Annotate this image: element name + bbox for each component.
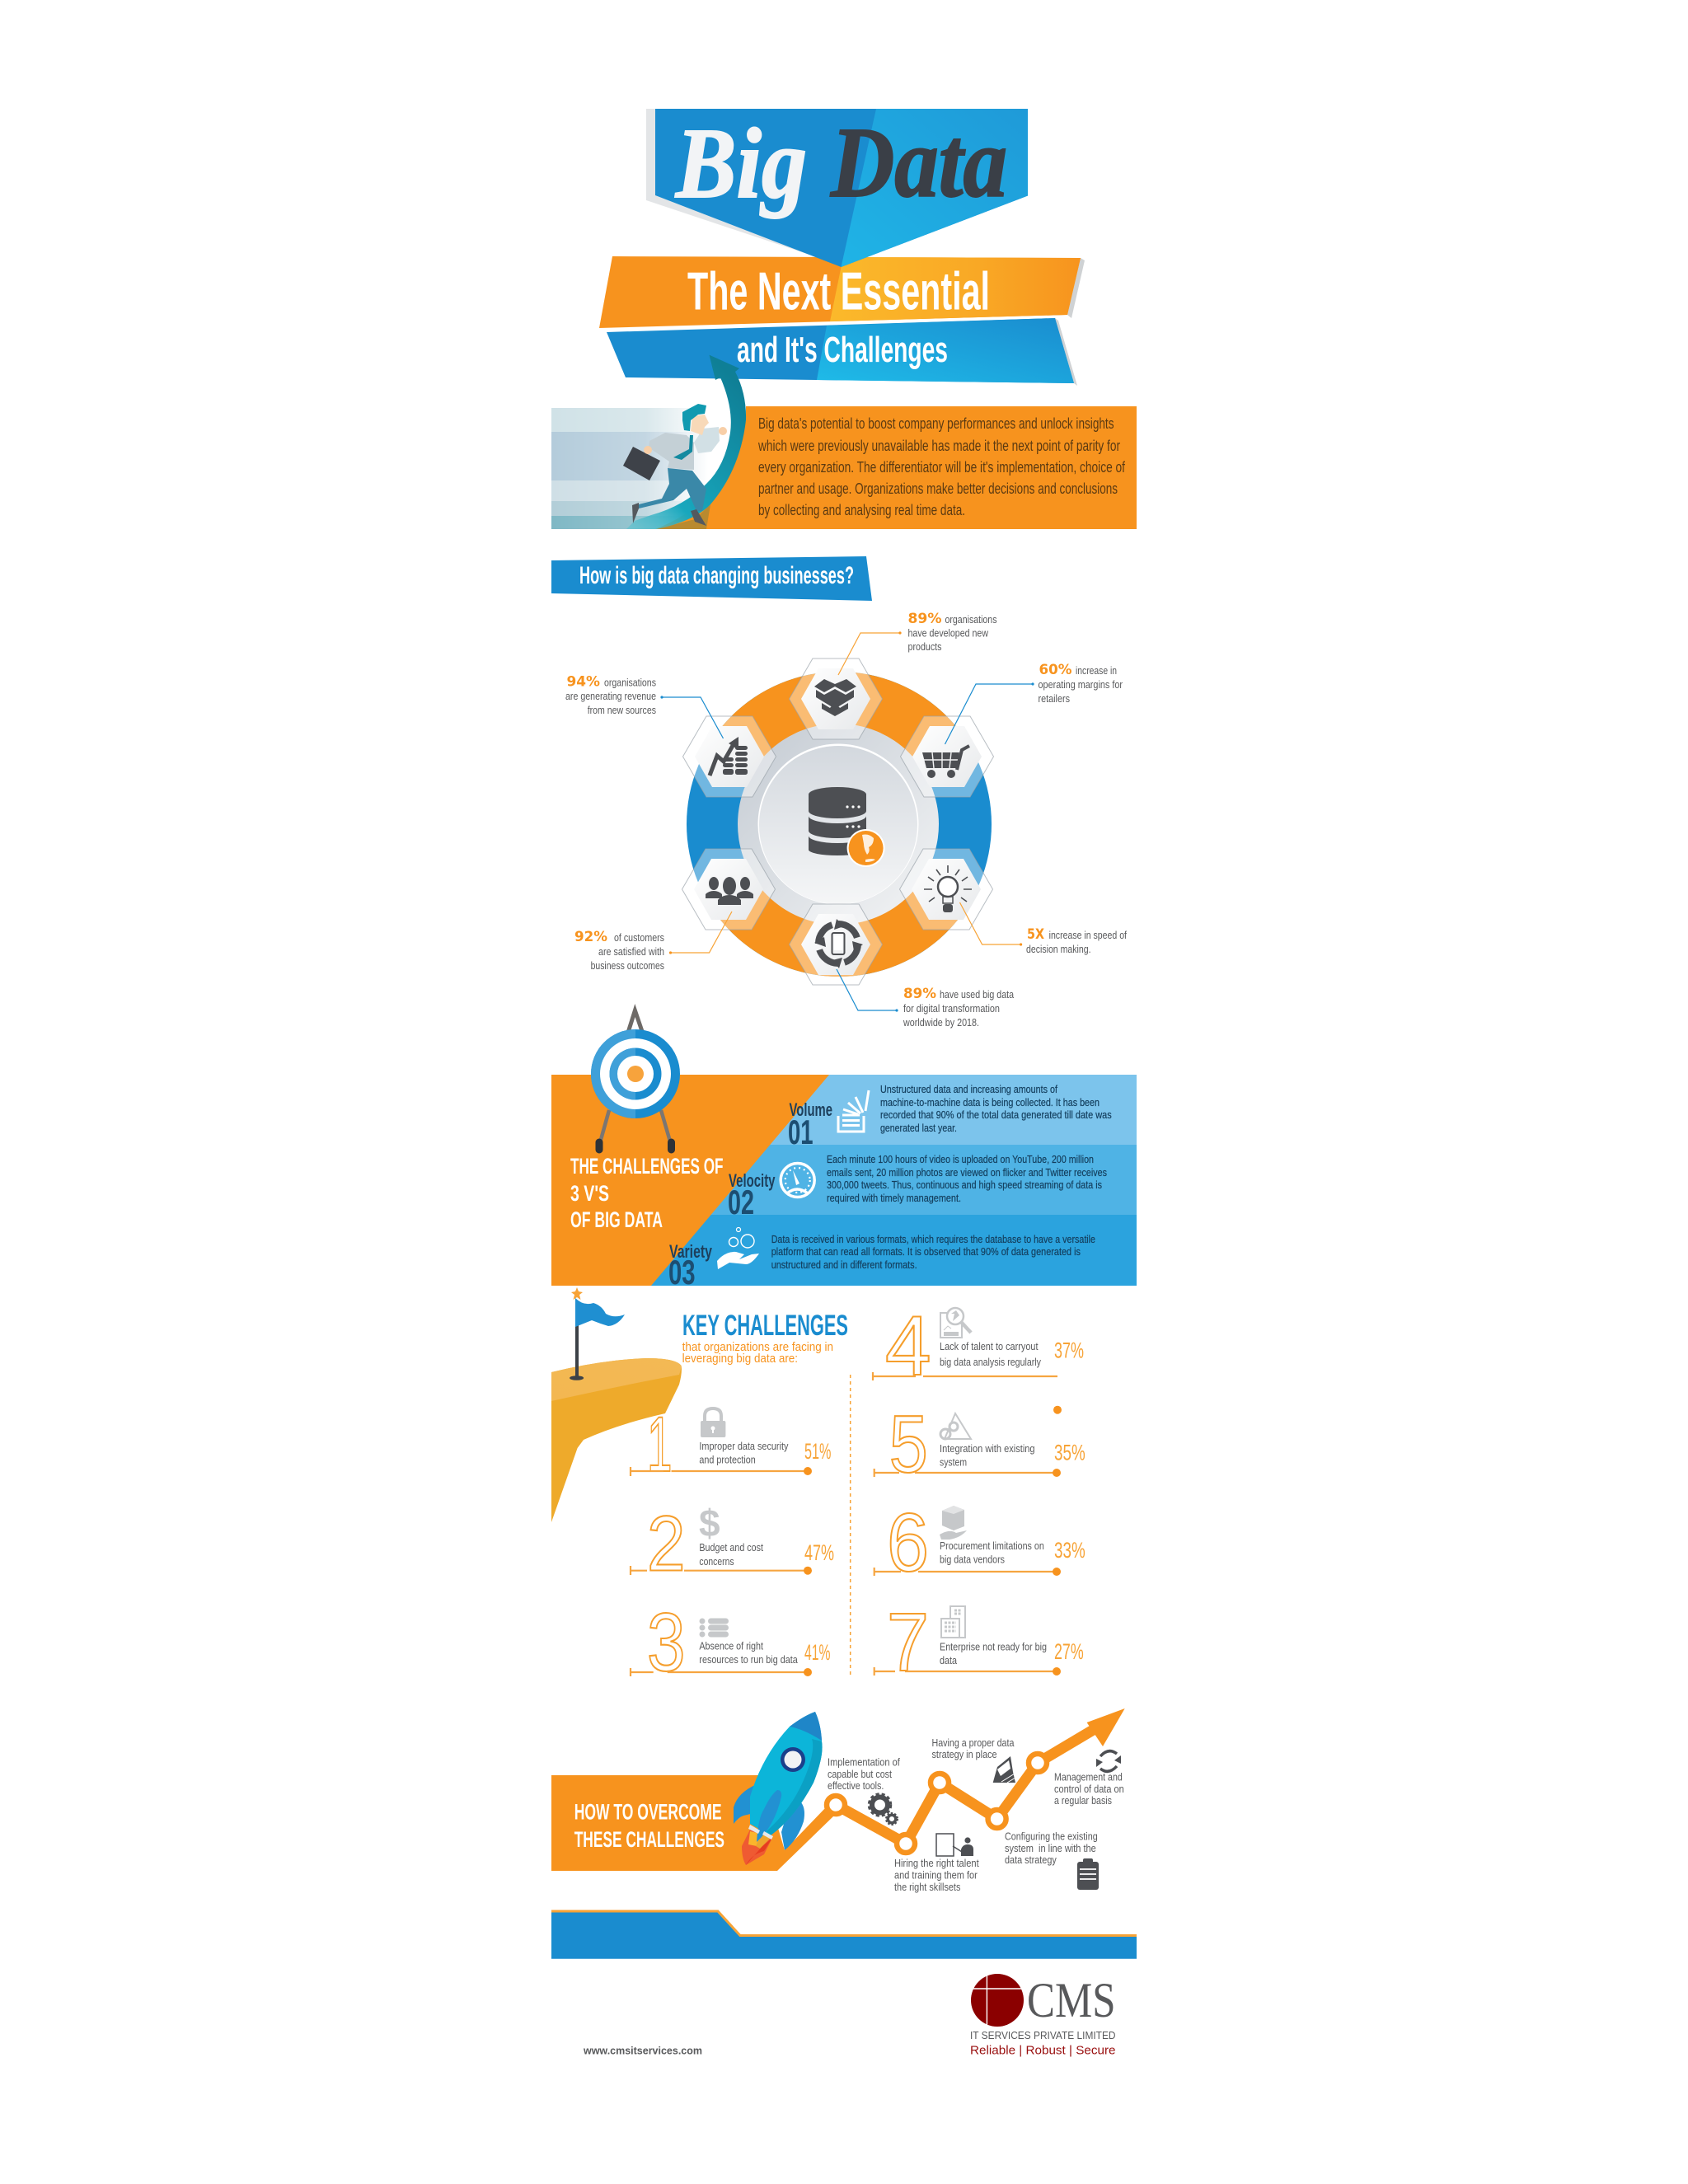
subtitle ribbon: The Next Essential: The Next Essential xyxy=(687,260,990,321)
icon: hand with bubbles xyxy=(717,1228,759,1269)
stat callout: 60% margins: increase in xyxy=(1076,665,1117,677)
challenge 6: procurement: 33% xyxy=(1054,1538,1085,1563)
row: volume: machine-to-machine data is being collected. It has been xyxy=(880,1097,1100,1108)
challenge 4: talent xyxy=(873,1299,1084,1414)
heading: key challenges: leveraging big data are: xyxy=(682,1352,798,1366)
challenge 2: budget: concerns xyxy=(699,1556,734,1568)
row: velocity: Each minute 100 hours of video is uploaded on YouTube, 200 million xyxy=(827,1154,1094,1165)
icon: target on stand xyxy=(591,1010,680,1150)
stat callout: 94% revenue: are generating revenue xyxy=(565,691,656,702)
challenge 4: talent: big data analysis regularly xyxy=(940,1357,1042,1368)
stat callout: 89% digital transformation: for digital transformation xyxy=(903,1003,1000,1015)
challenge 1: data security xyxy=(631,1401,831,1488)
row: volume: Volume xyxy=(790,1099,832,1120)
step 5: management: Management and xyxy=(1054,1772,1123,1783)
challenge 4: talent: 4 xyxy=(885,1299,931,1393)
challenge 6: procurement xyxy=(874,1497,1085,1589)
heading: the challenges of 3 V's: OF BIG DATA xyxy=(570,1207,663,1232)
challenge 6: procurement: big data vendors xyxy=(940,1554,1005,1566)
icon: flag on pole xyxy=(570,1287,625,1380)
stat callout: 94% revenue xyxy=(565,674,724,738)
heading: the challenges of 3 V's xyxy=(570,1154,724,1232)
intro text: by collecting and analysing real time data. xyxy=(758,502,965,518)
row: variety: platform that can read all formats. It is observed that 90% of data generated is xyxy=(771,1246,1081,1258)
challenge 6: procurement: Procurement limitations on xyxy=(940,1540,1044,1552)
stat callout: 5X decision making: 5X xyxy=(1027,926,1044,943)
running businessman xyxy=(623,404,727,526)
intro text: partner and usage. Organizations make better decisions and conclusions xyxy=(758,480,1118,497)
step 2: talent: and training them for xyxy=(894,1870,978,1882)
stat callout: 92% customers: of customers xyxy=(614,932,664,944)
stat callout: 92% customers: 92% xyxy=(574,929,607,945)
challenge 1: data security: 51% xyxy=(804,1439,831,1464)
icon: mobile refresh cycle xyxy=(814,919,863,968)
step 5: management xyxy=(1054,1751,1124,1807)
step 5: management: a regular basis xyxy=(1054,1795,1112,1807)
row: velocity: 02 xyxy=(728,1183,754,1221)
icon: report with magnifier xyxy=(940,1308,971,1338)
stat callout: 89% new products: have developed new xyxy=(908,628,989,640)
challenge 5: integration: Integration with existing xyxy=(940,1443,1035,1455)
step 3: data strategy: Having a proper data xyxy=(931,1737,1014,1749)
heading: key challenges xyxy=(682,1310,848,1366)
challenge 2: budget: 47% xyxy=(804,1540,834,1565)
heading: How is big data changing businesses: How is big data changing businesses? xyxy=(579,562,854,589)
row: velocity xyxy=(728,1154,1107,1221)
challenge 3: resources: 41% xyxy=(804,1640,830,1665)
stat callout: 5X decision making xyxy=(959,902,1127,955)
step 4: configuring: data strategy xyxy=(1005,1854,1057,1866)
stat callout: 89% new products: 89% xyxy=(908,611,941,627)
step 2: talent: the right skillsets xyxy=(894,1882,960,1893)
challenge 5: integration: 35% xyxy=(1054,1441,1085,1465)
challenge 2: budget xyxy=(631,1501,834,1588)
stat callout: 60% margins: retailers xyxy=(1039,693,1070,705)
row: volume: recorded that 90% of the total data generated till date was xyxy=(880,1109,1112,1121)
footer band xyxy=(551,1911,1137,1959)
challenge 3: resources xyxy=(631,1596,830,1689)
row: volume: Unstructured data and increasing amounts of xyxy=(880,1084,1057,1095)
step 3: data strategy: strategy in place xyxy=(931,1749,997,1760)
intro text: which were previously unavailable has made it the next point of parity for xyxy=(757,438,1120,454)
challenge 1: data security: and protection xyxy=(699,1455,756,1466)
icon: list xyxy=(699,1619,729,1637)
icon: office building xyxy=(941,1606,965,1638)
step 5: management: control of data on xyxy=(1054,1783,1124,1795)
row: volume: 01 xyxy=(788,1113,814,1151)
icon: triangle with gears xyxy=(940,1413,971,1439)
website: www.cmsitservices.com xyxy=(583,2045,702,2057)
step 2: talent: Hiring the right talent xyxy=(894,1858,979,1869)
stat callout: 94% revenue: 94% xyxy=(567,674,600,691)
step 3: data strategy xyxy=(931,1737,1015,1783)
icon: open box xyxy=(814,679,856,716)
stat callout: 5X decision making: decision making. xyxy=(1026,944,1091,955)
icon: database with globe xyxy=(809,787,885,867)
subtitle ribbon: and It's Challenges xyxy=(607,318,1077,386)
curved arrow xyxy=(626,355,746,529)
heading: key challenges: KEY CHALLENGES xyxy=(682,1310,848,1342)
hexagon cards xyxy=(682,658,994,985)
subtitle ribbon: and It's Challenges: and It's Challenges xyxy=(737,330,948,370)
logo: CMS: Reliable | Robust | Secure xyxy=(970,2044,1116,2058)
heading: the challenges of 3 V's: 3 V'S xyxy=(570,1181,609,1206)
stat callout: 92% customers xyxy=(574,912,732,972)
step 1: tools: Implementation of xyxy=(828,1757,900,1769)
challenge 3: resources: Absence of right xyxy=(699,1641,763,1652)
subtitle ribbon: The Next Essential xyxy=(599,256,1085,328)
stat callout: 5X decision making: increase in speed of xyxy=(1049,930,1127,941)
overcome: orange panel and trend arrow xyxy=(551,1708,1125,1871)
stat callout: 60% margins: operating margins for xyxy=(1039,679,1123,691)
challenge 7: enterprise: 7 xyxy=(887,1596,929,1689)
step 1: tools: effective tools. xyxy=(828,1780,884,1792)
step 4: configuring xyxy=(1005,1831,1099,1890)
icon: dollar sign: $ xyxy=(699,1502,720,1544)
intro text: Big data's potential to boost company performances and unlock insights xyxy=(758,415,1114,432)
icon: presenter at board xyxy=(936,1834,973,1856)
icon: refresh arrows xyxy=(1096,1751,1121,1771)
challenge 6: procurement: 6 xyxy=(887,1497,929,1589)
logo: CMS xyxy=(970,1973,1116,2058)
heading: how to overcome xyxy=(574,1800,724,1852)
ring diagram xyxy=(682,658,994,985)
icon: data stack xyxy=(838,1090,869,1132)
row: variety xyxy=(668,1228,1095,1291)
icon: growth chart with coins xyxy=(710,737,748,776)
cliff illustration xyxy=(551,1358,682,1522)
row: velocity: required with timely management. xyxy=(827,1193,961,1204)
heading: How is big data changing businesses xyxy=(551,556,872,601)
step 1: tools: capable but cost xyxy=(828,1769,892,1780)
step 4: configuring: system in line with the xyxy=(1005,1843,1096,1854)
icon: gears xyxy=(869,1794,898,1825)
intro text xyxy=(757,415,1126,518)
stat callout: 89% digital transformation: 89% xyxy=(903,986,936,1002)
stat callout: 60% margins: 60% xyxy=(1039,662,1071,678)
row: velocity: Velocity xyxy=(729,1170,776,1191)
challenge 2: budget: Budget and cost xyxy=(699,1542,763,1554)
icon: three people xyxy=(706,877,753,905)
challenge 1: data security: Improper data security xyxy=(699,1441,789,1452)
row: variety: Variety xyxy=(669,1241,713,1262)
heading: how to overcome: HOW TO OVERCOME xyxy=(574,1800,722,1825)
step 1: tools xyxy=(828,1757,900,1825)
challenge 4: talent: Lack of talent to carryout xyxy=(940,1341,1039,1352)
heading: the challenges of 3 V's: THE CHALLENGES OF xyxy=(570,1154,724,1179)
row: velocity: 300,000 tweets. Thus, continuous and high speed streaming of data is xyxy=(827,1179,1102,1191)
icon: light bulb xyxy=(924,865,972,912)
stat callout: 89% digital transformation: worldwide by 2018. xyxy=(903,1017,979,1029)
orange text panel xyxy=(655,406,1137,529)
step 2: talent xyxy=(894,1834,979,1893)
row: variety: 03 xyxy=(668,1253,696,1291)
icon: fanned papers xyxy=(993,1756,1015,1783)
challenge 5: integration: 5 xyxy=(889,1399,928,1489)
icon: box on hand xyxy=(940,1506,967,1540)
stat callout: 89% new products: organisations xyxy=(945,614,997,626)
title banner: Big Data xyxy=(646,107,1028,267)
row: variety: unstructured and in different formats. xyxy=(771,1259,917,1271)
icon: shopping cart xyxy=(922,746,969,778)
heading: key challenges: that organizations are facing in xyxy=(682,1340,833,1354)
icon: speedometer xyxy=(781,1164,814,1197)
stat callout: 92% customers: are satisfied with xyxy=(598,946,664,958)
stat callout: 94% revenue: organisations xyxy=(604,677,656,689)
stat callout: 89% new products: products xyxy=(908,641,941,653)
motion stripes xyxy=(551,408,708,529)
title banner: Big Data: Data xyxy=(830,107,1007,218)
stat callout: 89% digital transformation: have used big data xyxy=(940,989,1014,1001)
column divider xyxy=(850,1375,851,1675)
step 4: configuring: Configuring the existing xyxy=(1005,1831,1098,1843)
challenge 7: enterprise xyxy=(874,1596,1084,1689)
rocket xyxy=(734,1712,823,1865)
panel: 3 V's of big data xyxy=(551,1010,1137,1291)
stat callout: 89% digital transformation xyxy=(837,969,1014,1029)
stat callout: 60% margins xyxy=(945,662,1123,744)
challenge 7: enterprise: data xyxy=(940,1655,957,1666)
logo: CMS: IT SERVICES PRIVATE LIMITED xyxy=(970,2029,1116,2041)
stat callout: 94% revenue: from new sources xyxy=(588,705,656,716)
row: volume: generated last year. xyxy=(880,1122,957,1134)
challenge 3: resources: resources to run big data xyxy=(699,1654,798,1666)
title banner: Big Data: Big xyxy=(674,108,807,219)
intro text: every organization. The differentiator will be it's implementation, choice of xyxy=(758,459,1126,476)
stat callout: 92% customers: business outcomes xyxy=(591,960,664,972)
challenge 7: enterprise: Enterprise not ready for big xyxy=(940,1642,1047,1653)
icon: padlock xyxy=(701,1408,725,1437)
challenge 7: enterprise: 27% xyxy=(1054,1639,1084,1664)
row: volume xyxy=(788,1084,1112,1151)
row: variety: Data is received in various formats, which requires the database to have a versatile xyxy=(771,1234,1095,1245)
challenge 1: data security: 1 xyxy=(647,1401,673,1488)
challenge 4: talent: 37% xyxy=(1054,1338,1084,1363)
challenge 5: integration xyxy=(874,1399,1085,1489)
challenge 3: resources: 3 xyxy=(647,1596,686,1689)
intro panel xyxy=(551,355,1137,529)
heading: how to overcome: THESE CHALLENGES xyxy=(574,1827,724,1852)
row: velocity: emails sent, 20 million photos are viewed on flicker and Twitter receives xyxy=(827,1167,1107,1179)
stat callout: 89% new products xyxy=(838,611,997,675)
challenge 5: integration: system xyxy=(940,1457,967,1469)
challenge 2: budget: 2 xyxy=(647,1501,686,1588)
icon: clipboard xyxy=(1077,1858,1099,1890)
logo: CMS: CMS xyxy=(1027,1973,1116,2027)
